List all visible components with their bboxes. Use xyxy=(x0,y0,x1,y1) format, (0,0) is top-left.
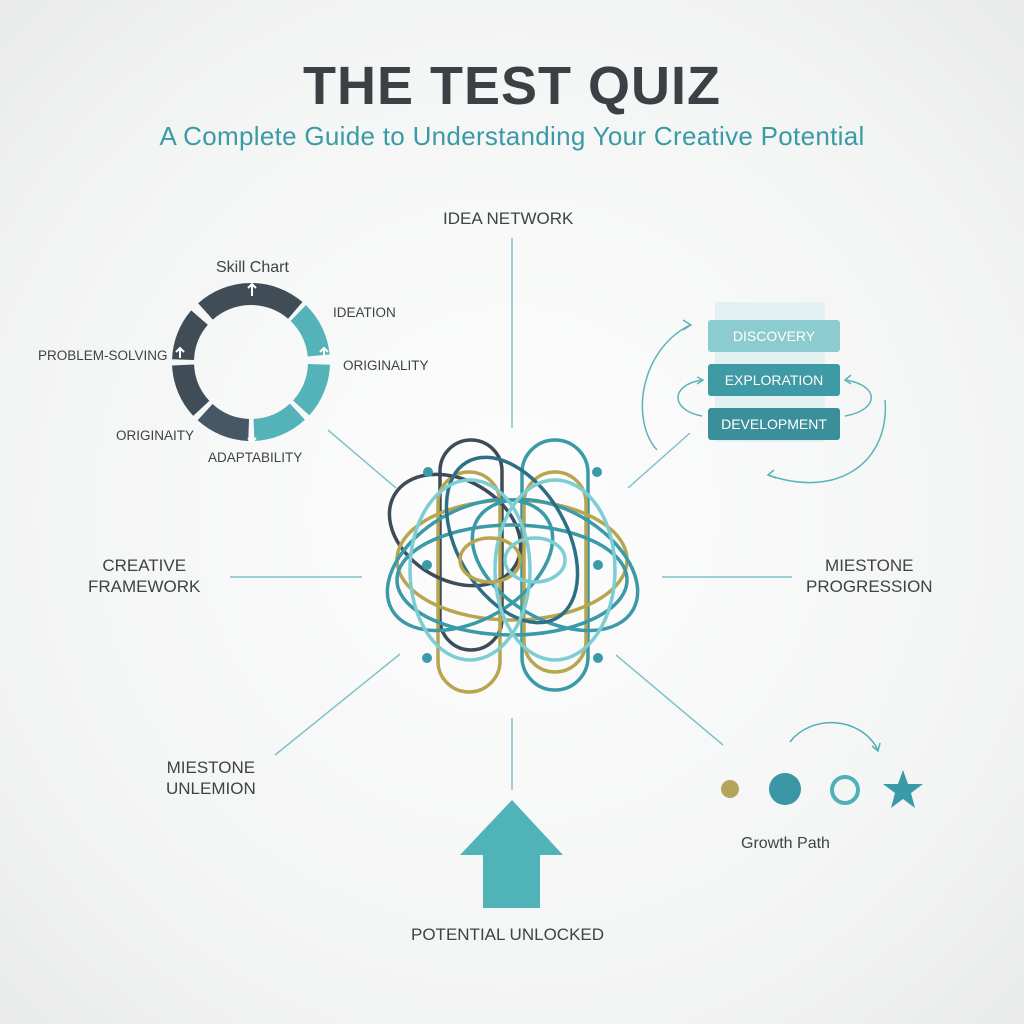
subtitle: A Complete Guide to Understanding Your Creative Potential xyxy=(159,121,865,151)
label: growth path: Growth Path xyxy=(741,835,830,852)
label: idea network: IDEA NETWORK xyxy=(443,209,573,228)
label: milestone progression: MIESTONE xyxy=(825,556,914,575)
label: creative framework xyxy=(88,556,200,596)
process flow xyxy=(708,302,840,442)
process flow: DISCOVERY xyxy=(733,328,816,344)
flow arrows xyxy=(642,320,885,483)
growth path xyxy=(721,723,923,808)
skill chart labels: PROBLEM-SOLVING xyxy=(38,348,168,363)
label: creative framework: CREATIVE xyxy=(102,556,186,575)
label: potential unlocked: POTENTIAL UNLOCKED xyxy=(411,925,604,944)
label: milestone unlemion: UNLEMION xyxy=(166,779,256,798)
skill chart labels: ORIGINALITY xyxy=(343,358,429,373)
title: THE TEST QUIZ xyxy=(303,56,721,116)
label: creative framework: FRAMEWORK xyxy=(88,577,200,596)
skill chart labels: ORIGINAITY xyxy=(116,428,194,443)
skill chart labels xyxy=(38,259,429,465)
skill chart labels: IDEATION xyxy=(333,305,396,320)
process flow: EXPLORATION xyxy=(725,372,823,388)
label: milestone progression xyxy=(806,556,933,596)
skill chart ring xyxy=(155,266,347,458)
brain network icon xyxy=(365,435,660,692)
label: milestone unlemion: MIESTONE xyxy=(167,758,255,777)
skill chart labels: ADAPTABILITY xyxy=(208,450,302,465)
process flow: DEVELOPMENT xyxy=(721,416,827,432)
label: milestone progression: PROGRESSION xyxy=(806,577,933,596)
big up arrow xyxy=(460,800,563,908)
connector lines xyxy=(230,238,792,790)
skill chart labels: Skill Chart xyxy=(216,259,289,276)
label: milestone unlemion xyxy=(166,758,256,798)
